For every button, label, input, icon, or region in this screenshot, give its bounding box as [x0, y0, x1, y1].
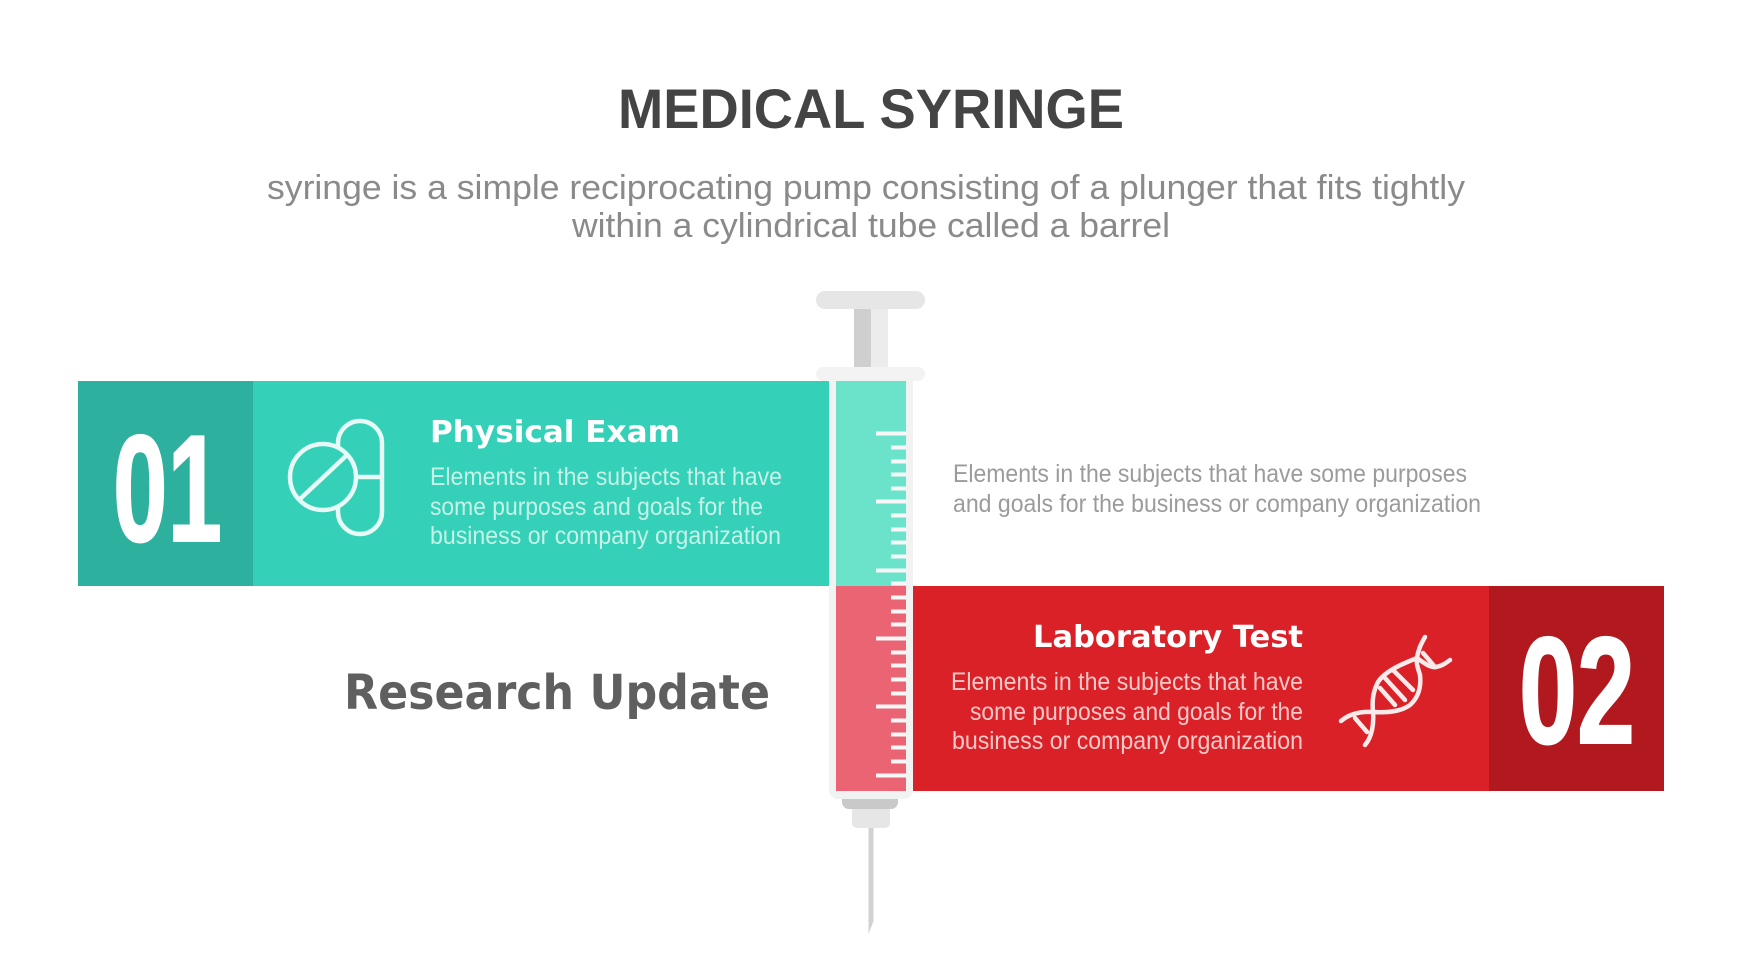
step 1 text: [430, 463, 782, 550]
subtitle: within a cylindrical tube called a barrel: [571, 207, 1170, 245]
syringe: [816, 291, 925, 934]
needle hub: [842, 799, 898, 828]
step 2 text: some purposes and goals for the: [970, 698, 1303, 726]
step 2 number: 02: [1519, 606, 1635, 776]
side text: step 1 description: [953, 460, 1481, 518]
barrel: [816, 367, 925, 799]
icon: DNA helix: [1341, 637, 1450, 745]
step 1 heading: Physical Exam: [430, 415, 680, 450]
heading: Research Update: Research Update: [344, 665, 770, 721]
step 2 heading: Laboratory Test: [1033, 620, 1303, 655]
step 1 text: business or company organization: [430, 522, 781, 550]
step 2 text: Elements in the subjects that have: [951, 668, 1303, 696]
step 2 text: business or company organization: [952, 727, 1303, 755]
step 2 text: [951, 668, 1303, 755]
subtitle: [267, 169, 1465, 245]
panel: step 2 band: [913, 586, 1664, 791]
step 1 number: 01: [113, 404, 222, 574]
panel: step 1 band: [78, 381, 829, 586]
title: MEDICAL SYRINGE: [618, 77, 1124, 140]
step 1 text: some purposes and goals for the: [430, 493, 763, 521]
needle: [868, 828, 874, 934]
side text: step 1 description: Elements in the subjects that have some purposes: [953, 460, 1467, 488]
step 1 text: Elements in the subjects that have: [430, 463, 782, 491]
icon: pills: [290, 421, 382, 534]
side text: step 1 description: and goals for the business or company organization: [953, 490, 1481, 518]
subtitle: syringe is a simple reciprocating pump consisting of a plunger that fits tightly: [267, 169, 1465, 207]
scale ticks: [876, 432, 906, 778]
plunger: [816, 291, 925, 367]
